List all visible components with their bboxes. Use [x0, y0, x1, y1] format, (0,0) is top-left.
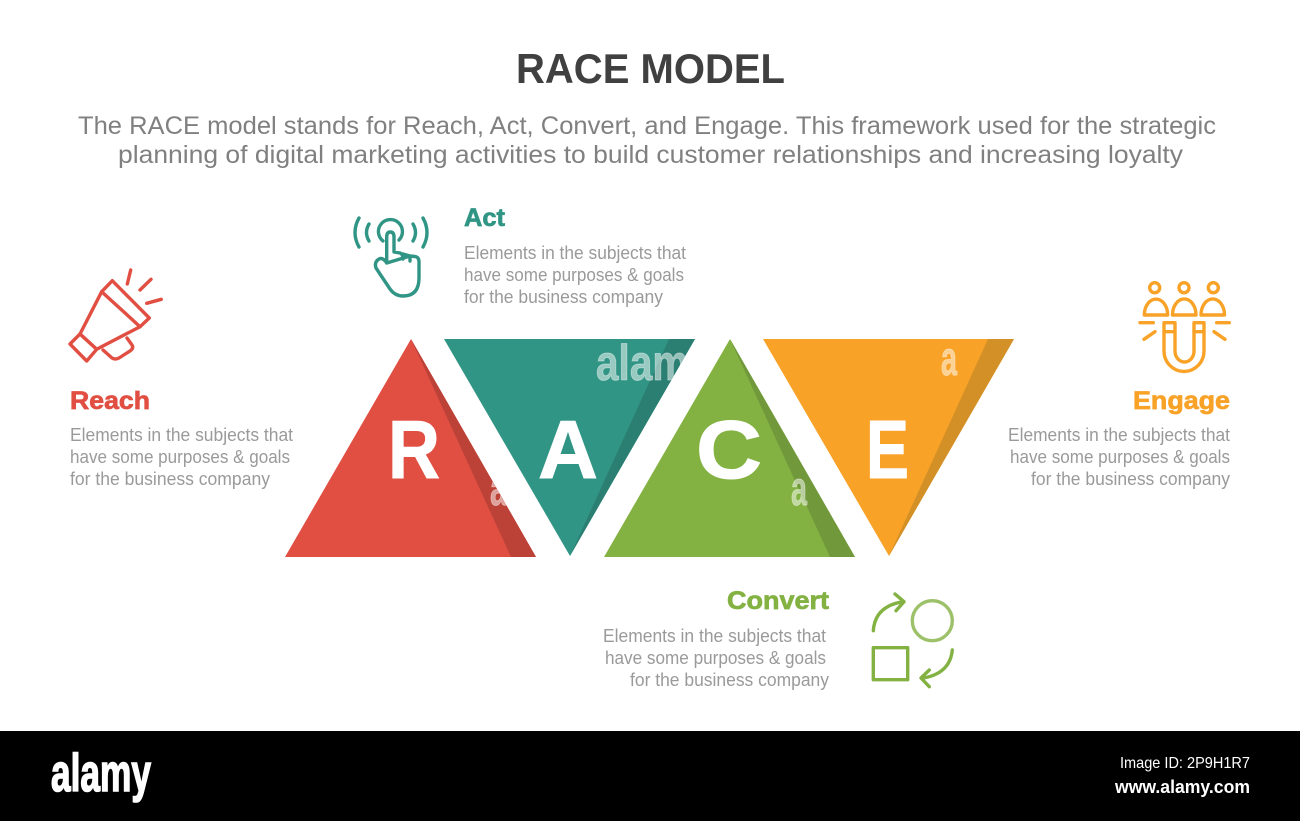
text: Convert description: have some purposes & goals — [605, 648, 826, 668]
text: Reach description — [70, 425, 293, 489]
text: Convert description: Elements in the subjects that — [603, 626, 826, 646]
text: Engage description — [1008, 425, 1230, 489]
triangle: A: alamy — [596, 335, 711, 391]
triangle: A: A — [538, 403, 598, 496]
triangle: R — [285, 339, 536, 557]
triangle: A — [444, 335, 711, 556]
text: Engage description: have some purposes & goals — [1010, 447, 1230, 467]
title: RACE MODEL — [516, 45, 785, 92]
text: Act description: for the business company — [464, 287, 663, 307]
subtitle — [78, 112, 1216, 169]
heading: Convert: Convert — [727, 587, 830, 615]
text: Act description: Elements in the subjects that — [464, 243, 686, 263]
footer image id: Image ID: 2P9H1R7 — [1120, 755, 1250, 772]
triangle: E: a — [941, 333, 957, 386]
icon: touch hand — [355, 218, 427, 296]
text: Act description — [464, 243, 686, 307]
triangle: R: R — [388, 403, 440, 496]
text: Engage description: Elements in the subjects that — [1008, 425, 1230, 445]
subtitle: planning of digital marketing activities to build customer relationships and increasing loyalty — [118, 141, 1184, 169]
text: Convert description: for the business company — [630, 670, 829, 690]
text: Act description: have some purposes & goals — [464, 265, 684, 285]
triangle: R: a — [490, 463, 507, 516]
text: Reach description: have some purposes & goals — [70, 447, 290, 467]
triangle: E: E — [866, 403, 909, 496]
text: Convert description — [603, 626, 829, 690]
heading: Engage: Engage — [1133, 387, 1230, 415]
footer url: www.alamy.com — [1114, 777, 1250, 797]
text: Reach description: for the business company — [70, 469, 270, 489]
text: Reach description: Elements in the subjects that — [70, 425, 293, 445]
triangle: C: C — [696, 403, 762, 496]
text: Engage description: for the business company — [1031, 469, 1230, 489]
heading: Reach: Reach — [70, 387, 150, 415]
triangle: C: a — [791, 463, 807, 516]
footer logo: alamy — [51, 744, 151, 803]
icon: people magnet — [1140, 283, 1229, 371]
icon: convert cycle — [873, 594, 952, 687]
heading: Act: Act — [464, 204, 506, 232]
triangle: E — [763, 333, 1014, 556]
footer bar — [0, 731, 1300, 821]
subtitle: The RACE model stands for Reach, Act, Convert, and Engage. This framework used for the strategic — [78, 112, 1216, 140]
triangle: C — [604, 339, 855, 557]
icon: megaphone — [70, 270, 161, 361]
